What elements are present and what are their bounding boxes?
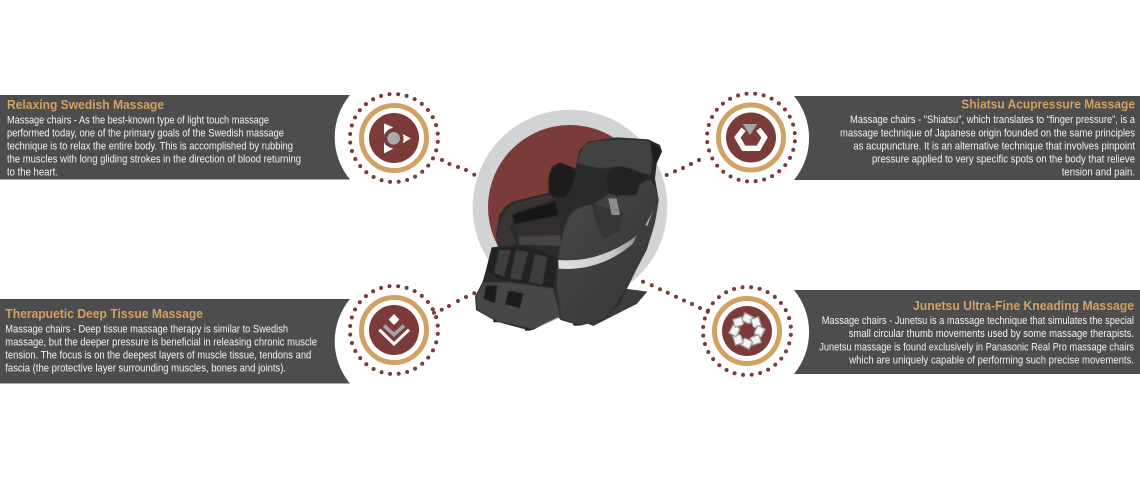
- remote control: [608, 198, 620, 215]
- panel: therapeutic deep tissue massage: [0, 299, 350, 384]
- icon: diamond and chevrons: [379, 314, 409, 344]
- body text: fascia (the protective layer surrounding muscles, bones and joints).: [5, 362, 286, 374]
- panel background: [794, 96, 1140, 180]
- arrow: dotted connector top left: [440, 158, 476, 177]
- panel background: [0, 299, 350, 384]
- body text: tension. The focus is on the deepest layers of muscle tissue, tendons and: [5, 350, 311, 362]
- body text: to the heart.: [7, 166, 58, 178]
- body text: Massage chairs - Deep tissue massage therapy is similar to Swedish: [5, 324, 288, 336]
- heading: Junetsu Ultra-Fine Kneading Massage: [913, 299, 1134, 313]
- massage chair illustration: [475, 137, 662, 331]
- silver side accent: [645, 210, 653, 226]
- body text: [5, 324, 317, 374]
- panel background: [0, 95, 350, 180]
- heading: Shiatsu Acupressure Massage: [961, 98, 1135, 112]
- icon: triangles around dot: [384, 123, 411, 153]
- body text: technique is to relax the entire body. This is accomplished by rubbing: [7, 140, 293, 152]
- left arm pad: [549, 163, 575, 198]
- badge: shiatsu icon: [703, 90, 799, 185]
- wheels: [493, 318, 579, 331]
- seat: [515, 217, 561, 237]
- icon: rotary kneading star: [729, 313, 765, 349]
- foot rest: [476, 282, 560, 329]
- badge: swedish icon: [346, 90, 442, 186]
- left armrest: [497, 194, 554, 247]
- chair details: [476, 139, 661, 329]
- chair base: [570, 288, 647, 326]
- right side pad: [607, 166, 651, 196]
- panel: junetsu ultra-fine kneading massage: [794, 290, 1140, 374]
- right side panel: [557, 177, 658, 325]
- body text: the muscles with long gliding strokes in the direction of blood returning: [7, 154, 301, 166]
- heading: Therapuetic Deep Tissue Massage: [5, 307, 203, 321]
- leg rest: [487, 246, 557, 287]
- icon: open hexagon with triangle: [737, 124, 765, 148]
- body text: massage, but the deeper pressure is beneficial in releasing chronic muscle: [5, 336, 317, 348]
- badge: deep tissue icon: [346, 282, 442, 378]
- silver stripe: [558, 236, 637, 269]
- body text: [819, 315, 1134, 366]
- headrest: [577, 139, 653, 175]
- panel: shiatsu acupressure massage: [794, 96, 1140, 180]
- panel background: [794, 290, 1140, 374]
- body text: performed today, one of the primary goals of the Swedish massage: [7, 128, 284, 140]
- heading: Relaxing Swedish Massage: [7, 98, 164, 112]
- panel: relaxing swedish massage: [0, 95, 350, 180]
- arrow: dotted connector bottom right: [641, 280, 710, 314]
- body text: [7, 114, 301, 178]
- body text: [840, 114, 1136, 178]
- arrow: dotted connector top right: [665, 158, 701, 177]
- back cushion: [557, 172, 608, 240]
- center backdrop circles: [473, 110, 667, 304]
- body text: Massage chairs - As the best-known type of light touch massage: [7, 114, 269, 126]
- chair silhouette: [475, 137, 662, 330]
- badge: junetsu icon: [699, 283, 795, 379]
- arrow: dotted connector bottom left: [432, 291, 476, 315]
- pocket: [592, 203, 623, 238]
